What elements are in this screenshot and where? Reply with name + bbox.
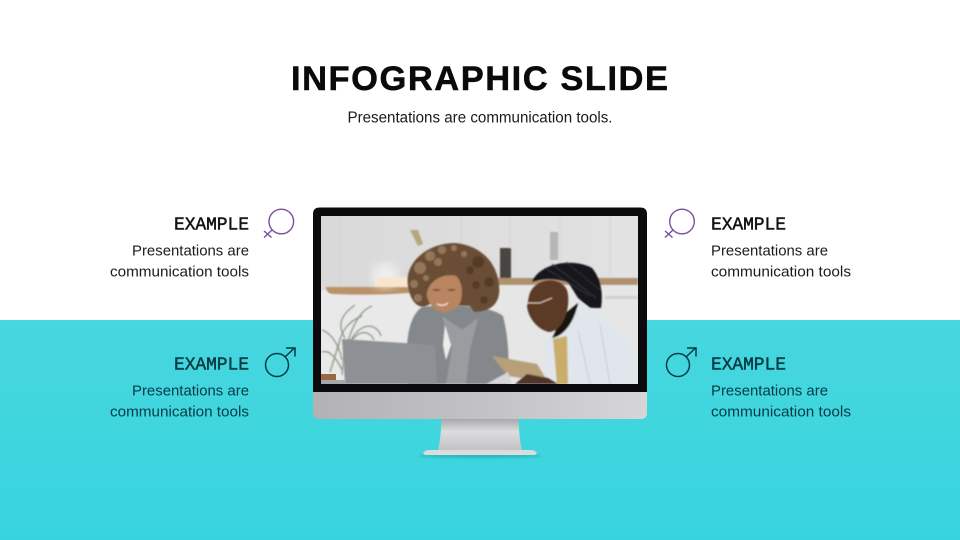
laptop <box>342 339 437 384</box>
man <box>526 261 612 384</box>
subtitle: Presentations are communication tools. <box>348 110 612 126</box>
title: INFOGRAPHIC SLIDE <box>291 60 668 98</box>
monitor stand <box>418 419 542 458</box>
top-left item <box>110 216 249 280</box>
teal background band <box>0 320 960 540</box>
kitchen <box>321 216 638 384</box>
heading: EXAMPLE <box>711 216 786 236</box>
bottom-right item <box>711 356 851 420</box>
description: Presentations are <box>711 382 828 400</box>
heading: EXAMPLE <box>174 356 249 376</box>
description <box>711 382 851 420</box>
icon: male symbol left <box>266 348 295 376</box>
icon: male symbol right <box>666 348 696 376</box>
description <box>711 242 851 280</box>
description <box>110 382 249 420</box>
monitor bezel <box>313 208 647 392</box>
woman <box>407 243 508 384</box>
bottom-left item <box>110 356 249 420</box>
tablet and hands <box>486 356 558 384</box>
description: communication tools <box>711 404 851 420</box>
heading: EXAMPLE <box>711 356 786 376</box>
top-right item <box>711 216 851 280</box>
monitor chin <box>313 392 647 419</box>
description: communication tools <box>110 404 249 420</box>
monitor illustration <box>313 208 647 458</box>
heading: EXAMPLE <box>174 216 249 236</box>
description: communication tools <box>110 264 249 280</box>
description: Presentations are <box>132 242 249 260</box>
icon: female symbol right <box>665 209 694 238</box>
plant <box>322 305 381 375</box>
icon: female symbol left <box>264 209 294 238</box>
description: Presentations are <box>132 382 249 400</box>
description <box>110 242 249 280</box>
description: communication tools <box>711 264 851 280</box>
photo: two colleagues with laptop and tablet <box>321 216 638 384</box>
description: Presentations are <box>711 242 828 260</box>
